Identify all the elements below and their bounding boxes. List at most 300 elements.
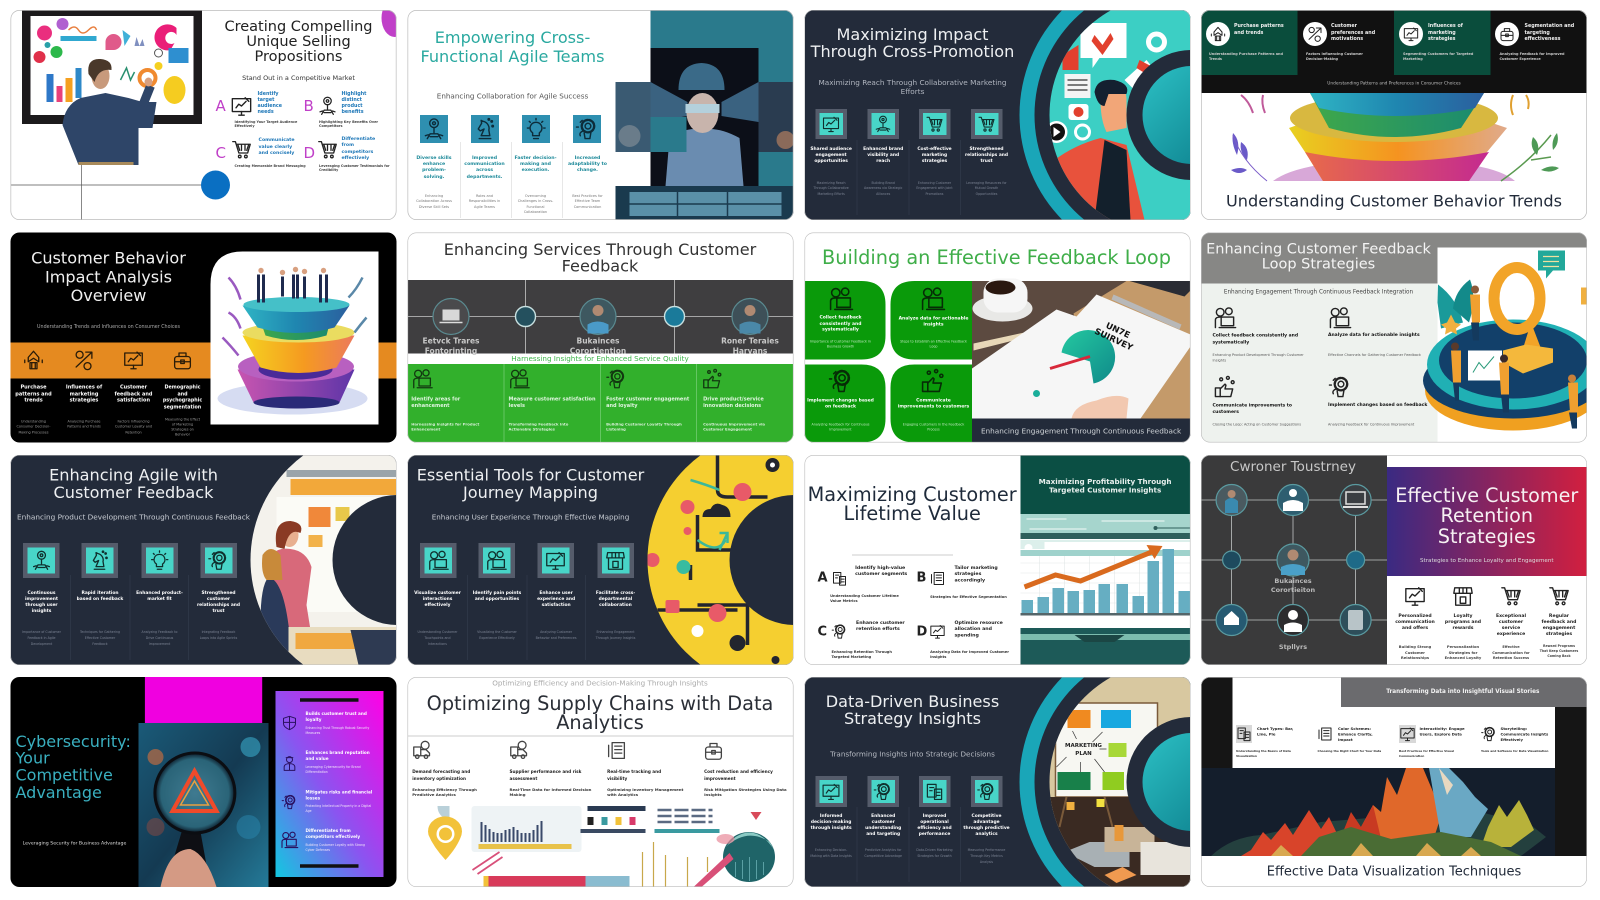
column: identify areas: Harnessing Insights for Product: [411, 421, 480, 426]
item: trust: Measures: [306, 731, 321, 735]
column: loyalty: Enhanced Loyalty: [1445, 656, 1482, 660]
item: improved communication: [464, 115, 505, 209]
title: Data-Driven Business: [826, 692, 999, 710]
item: color schemes: Choosing the Right Chart for Your Data: [1318, 749, 1381, 753]
tile: analyze data: Analyze data for actionable: [899, 315, 968, 321]
slide: Maximizing Impact Through Cross-Promotion: [804, 10, 1190, 220]
column: preferences: Decision-Making: [1306, 57, 1339, 61]
item: chart types: Visualization: [1236, 754, 1257, 758]
item: increased adaptability: Best Practices for: [572, 194, 603, 198]
photo: process diagram: Roner Teraies: [721, 336, 779, 345]
item: analyze: [1328, 308, 1422, 357]
title: Advantage: [16, 782, 102, 802]
item: improved communication: Roles and: [476, 194, 493, 198]
item A: customer segments: [855, 570, 907, 576]
photo: process diagram: Eetvck Trares: [422, 336, 480, 345]
item: cost-effective: Engagement with Joint: [916, 186, 953, 190]
item: risks: Age: [306, 809, 312, 813]
item: customer understanding: and targeting: [866, 830, 900, 836]
item: rapid iteration: Rapid iteration: [81, 590, 119, 596]
item: shared audience: engagement: [816, 152, 847, 158]
caption bar: [972, 418, 1191, 442]
slide: Maximizing Customer Lifetime Value: [804, 455, 1190, 665]
column: drive innovation: Customer Engagement: [703, 426, 752, 431]
column: drive innovation: Continuous Improvement via: [703, 421, 765, 426]
column: foster engagement: Building Customer Loyalty Through: [606, 421, 682, 426]
slide background: [408, 10, 794, 220]
item: collaboration: Facilitate cross-: [596, 590, 635, 596]
item: diverse skills: Diverse Skill Sets: [419, 205, 449, 209]
column dividers: [504, 364, 696, 442]
gradient title panel: [1387, 467, 1587, 576]
item A: Value Metrics: [830, 599, 858, 603]
column: loyalty: Personalization: [1447, 645, 1479, 649]
column: regular feedback: That Keep Customers: [1540, 649, 1578, 653]
column: segmentation: Measuring the Effect: [165, 418, 201, 422]
column: segmentation: Segmentation and: [1524, 22, 1575, 28]
slide: Effective Customer Retention Strategies: [1201, 455, 1587, 665]
item: trust: [284, 710, 370, 735]
item C: C: [216, 144, 226, 162]
item: collaboration: departmental: [599, 596, 633, 602]
photo labels: Bukainces: [1274, 577, 1312, 585]
column: foster engagement: [606, 371, 690, 431]
gray header: [1201, 232, 1587, 284]
item: increased adaptability: [568, 115, 608, 209]
item B: distinct: [342, 96, 363, 102]
tile: implement changes: [804, 364, 886, 442]
item: faster decisions: execution.: [522, 166, 550, 172]
tile: collect feedback: Importance of Customer Feedback in: [810, 340, 871, 344]
inner dark circle: [1126, 50, 1190, 180]
subtitle: Harnessing Insights for Enhanced Service Quality: [511, 354, 689, 363]
item: informed decisions: decision-making: [811, 818, 851, 824]
item: brand visibility: reach: [876, 158, 890, 164]
item: competitive advantage: Through Key Metrics: [969, 854, 1003, 858]
column: loyalty: Strategies for: [1449, 651, 1478, 655]
slide background: [408, 455, 794, 665]
photo: process diagram: Harvans: [733, 346, 768, 355]
column: supplier: Supplier performance and risk: [510, 768, 582, 774]
slide background: [804, 10, 1190, 220]
item: operational efficiency: Improved: [923, 812, 946, 818]
item C: Targeted Marketing: [832, 655, 872, 659]
column: purchase patterns: Purchase: [21, 384, 47, 390]
item: enhanced fit: Improvement: [149, 642, 171, 646]
item: improved communication: communication: [464, 160, 505, 166]
item: strengthened relationships: trust: [212, 608, 225, 614]
title: Journey Mapping: [462, 482, 598, 502]
column: tracking: visibility: [607, 776, 627, 780]
item: collaboration: collaboration: [599, 602, 632, 608]
column: purchase patterns: Trends: [1209, 57, 1222, 61]
item: trust: Enhancing Trust Through Robust Security: [306, 726, 370, 730]
title: Optimizing Supply Chains with Data: [427, 692, 773, 714]
item: relationships: Leveraging Resources for: [966, 181, 1007, 185]
slide background: [1201, 232, 1587, 442]
photo: magnifier on warning sign: [138, 723, 268, 887]
item: competitive advantage: analytics: [975, 830, 998, 836]
item: continuous improvement: improvement: [25, 596, 58, 602]
title: Enhancing Agile with: [49, 465, 218, 484]
slide background: [804, 455, 1190, 665]
photo: marketing plan board: [1044, 677, 1194, 887]
item: diverse skills: Collaboration Across: [416, 199, 452, 203]
item: strengthened relationships: [197, 543, 240, 640]
item: rapid iteration: based on feedback: [77, 596, 123, 602]
item: diverse skills: enhance: [423, 160, 445, 166]
slide background: [10, 232, 396, 442]
item: competitive advantage: Analysis: [980, 860, 993, 864]
title: Understanding Customer Behavior Trends: [1226, 192, 1562, 210]
teal ring: [1020, 632, 1320, 900]
column: preferences: Factors Influencing Customer: [1306, 52, 1363, 56]
column: influences: Influences of: [66, 384, 103, 390]
column: foster engagement: Foster customer engagement: [606, 396, 690, 402]
frame lines: [10, 165, 202, 220]
item: chart types: Line, Pie: [1257, 731, 1276, 736]
item: storytelling: [1481, 726, 1549, 753]
item A: [818, 564, 907, 603]
photo caption text: Cwroner Toustrney: [1230, 459, 1356, 475]
item: color schemes: Color Schemes:: [1338, 726, 1372, 730]
item A: A: [216, 97, 226, 115]
item A: target: [258, 96, 275, 102]
header text: Maximizing Profitability Through: [1039, 476, 1172, 486]
column: drive innovation: innovation decisions: [703, 403, 761, 409]
column: segmentation: Behavior: [175, 432, 191, 436]
tile: collect feedback: consistently and: [820, 320, 861, 326]
gray header: [1341, 677, 1587, 707]
slide background: [804, 232, 1190, 442]
column: segmentation: psychographic: [163, 397, 202, 403]
photo: journey network: [1201, 455, 1387, 665]
column: personalized: Relationships: [1401, 656, 1430, 660]
column: purchase patterns: patterns and: [15, 392, 52, 398]
dark side strips: [1201, 677, 1587, 856]
item: visualize: Touchpoints and: [424, 636, 450, 640]
item: cost-effective: marketing: [922, 152, 947, 158]
photo: process diagram: Bukainces: [576, 336, 620, 345]
column: marketing influences: marketing: [1428, 30, 1456, 36]
subtitle: Maximizing Reach Through Collaborative Marketing: [819, 78, 1006, 86]
item: analyze: Analyze data for actionable insights: [1328, 332, 1420, 338]
chart image: [1020, 514, 1190, 665]
item A: needs: [258, 108, 274, 114]
item: visualize: Interactions: [428, 642, 447, 646]
item: customer understanding: understanding: [865, 824, 901, 830]
item C: [818, 620, 905, 659]
item: collaboration: Enhancing Engagement: [596, 630, 635, 634]
slide border: [1201, 677, 1587, 887]
slide: Essential Tools for Customer Journey Mapping: [408, 455, 860, 665]
item D: Differentiate: [342, 136, 375, 142]
column: tracking: [607, 743, 684, 796]
column: segmentation: [1495, 22, 1575, 61]
item: operational efficiency: Data-Driven Marketing: [916, 848, 953, 852]
column: personalized: communication: [1395, 618, 1435, 624]
item B: accordingly: [954, 577, 985, 583]
column dividers: [70, 575, 188, 660]
item B: product: [342, 102, 363, 108]
item: faster decisions: Faster decision-: [514, 154, 557, 160]
column: marketing influences: strategies: [1428, 36, 1456, 42]
slide: Creating Compelling Unique Selling Propositions: [10, 0, 408, 220]
tile: analyze data: Steps to Establish an Effective Feedback: [900, 340, 967, 344]
item: cost-effective: [916, 109, 953, 196]
photo labels: Stpllyrs: [1279, 643, 1307, 651]
subtitle: Understanding Trends and Influences on Consumer Choices: [37, 324, 180, 330]
item A: Understanding Customer Lifetime: [830, 594, 899, 598]
illustration: feedback loop platform: [1423, 248, 1600, 442]
column: purchase patterns: [15, 351, 52, 434]
item: relationships: trust: [980, 158, 993, 164]
item C: Enhancing Retention Through: [832, 650, 892, 654]
teal ring: [1020, 10, 1190, 220]
column: foster engagement: Listening: [606, 426, 626, 431]
item: enhance UX: experience and: [537, 596, 575, 602]
item: brand visibility: Enhanced brand: [863, 146, 903, 152]
photo: survey on clipboard: SUIRVEY: [1093, 327, 1135, 354]
item: operational efficiency: operational: [920, 818, 949, 824]
dark ring: [1034, 10, 1190, 220]
title: Through Cross-Promotion: [810, 42, 1014, 60]
tile: implement changes: Analyzing Feedback for Continuous: [811, 422, 870, 426]
item: relationships: relationships and: [965, 152, 1008, 158]
title: Enhancing Customer Feedback: [1206, 242, 1431, 258]
item: customer understanding: Enhanced: [871, 812, 895, 818]
item D: Credibility: [319, 168, 339, 172]
item: increased adaptability: Communication: [574, 205, 601, 209]
item C: value clearly: [258, 144, 292, 150]
item: storytelling: Storytelling:: [1500, 726, 1528, 730]
tile: collect feedback: [804, 281, 886, 360]
column: segmentation: Demographic: [165, 384, 201, 390]
tile: communicate improvements: [890, 364, 972, 442]
tile: implement changes: on feedback: [825, 403, 857, 409]
item: differentiates: Differentiates from: [306, 828, 351, 832]
column: purchase patterns: Understanding: [21, 420, 46, 424]
subtitle: Enhancing Product Development Through Continuous Feedback: [17, 512, 251, 522]
photo: process diagram: Corortiention: [570, 346, 626, 355]
title: Impact Analysis: [45, 267, 172, 286]
item A: Identify: [258, 90, 279, 96]
item: analyze: Effective Channels for Gathering Customer Feedback: [1328, 353, 1422, 357]
header band: [1201, 10, 1587, 93]
slide border: [408, 677, 794, 887]
item: communicate: [1212, 376, 1301, 426]
item: trust: loyalty: [306, 716, 322, 722]
item: cost-effective: Promotions: [926, 192, 944, 196]
column: service: [1492, 588, 1530, 660]
column: identify areas: Enhancement: [411, 426, 441, 431]
column: purchase patterns: Consumer Decision-: [16, 424, 51, 428]
item: operational efficiency: Strategies for Growth: [917, 854, 952, 858]
item: chart types: Understanding the Basics of Data: [1236, 749, 1291, 753]
item: competitive advantage: [963, 776, 1010, 864]
column: marketing influences: Segmenting Customers for Targeted: [1403, 52, 1474, 56]
title: Empowering Cross-: [435, 28, 590, 46]
column: cost: Insights: [704, 792, 722, 796]
column: cost: Cost reduction and efficiency: [704, 768, 773, 774]
column: influences: marketing: [70, 392, 99, 398]
item: collect: Enhancing Product Development Through Customer: [1212, 353, 1304, 357]
column: personalized: [1395, 588, 1435, 660]
item: brand visibility: [863, 109, 903, 196]
item D: D: [916, 624, 928, 640]
item: relationships: Opportunities: [976, 192, 998, 196]
teal blocks: [650, 10, 794, 82]
column: purchase patterns: Making Processes: [18, 430, 49, 434]
item: competitive advantage: Competitive: [972, 812, 1002, 818]
rule: [852, 554, 953, 556]
photo: presenter at whiteboard: [22, 10, 202, 165]
column: influences: [66, 351, 103, 428]
title: Effective Data Visualization Techniques: [1267, 864, 1521, 880]
column: influences: Analyzing Purchase: [68, 420, 100, 424]
item: implement: Analyzing Feedback for Continuous Improvement: [1328, 422, 1415, 426]
item C: retention efforts: [856, 626, 900, 632]
column: preferences: preferences and: [1331, 30, 1376, 36]
item C: Enhance customer: [856, 620, 905, 626]
column: preferences: motivations: [1331, 36, 1363, 42]
item: faster decisions: making and: [520, 160, 551, 166]
column: loyalty: [1445, 588, 1482, 660]
corner accent: [382, 10, 396, 37]
item: improved communication: Improved: [472, 154, 497, 160]
item: color schemes: Impact: [1338, 736, 1353, 742]
item: collaboration: [595, 543, 636, 640]
item: enhance UX: Enhance user: [539, 590, 574, 596]
item: reputation: [284, 750, 370, 774]
column: measure satisfaction: levels: [508, 403, 525, 409]
column: tracking: with Analytics: [607, 792, 639, 796]
item: communicate: Closing the Loop: Acting on Customer Suggestions: [1212, 422, 1301, 426]
column: segmentation: and: [177, 391, 188, 397]
column: supplier: assessment: [510, 776, 537, 780]
item B: strategies: [954, 570, 982, 576]
item D: Optimize resource: [954, 620, 1003, 626]
title: Lifetime Value: [844, 502, 981, 524]
title: Overview: [71, 286, 146, 304]
item: faster decisions: Challenges in Cross-: [518, 199, 554, 203]
item D: Leveraging Customer Testimonials for: [319, 164, 390, 168]
slide background: [1201, 677, 1587, 887]
column: regular feedback: Reward Programs: [1543, 644, 1575, 648]
item: enhance UX: satisfaction: [542, 602, 571, 608]
item: storytelling: Communicate Insights: [1500, 731, 1549, 736]
item: diverse skills: Diverse skills: [416, 154, 452, 160]
illustration: funnel: [1231, 93, 1559, 181]
title: Feedback: [562, 256, 639, 275]
title: Unique Selling: [246, 34, 351, 50]
item: increased adaptability: Effective Team: [575, 199, 601, 203]
item: shared audience: [810, 109, 852, 196]
item: strengthened relationships: relationships and: [197, 602, 240, 608]
column: measure satisfaction: Transforming Feedback into: [508, 421, 569, 426]
item: shared audience: Maximizing Reach: [817, 181, 846, 185]
item: increased adaptability: change.: [577, 166, 598, 172]
item: continuous improvement: [22, 543, 62, 646]
column: regular feedback: engagement: [1543, 624, 1576, 630]
item: strengthened relationships: Loops into Agile Sprints: [200, 636, 238, 640]
eyebrow text: Optimizing Efficiency and Decision-Making Through Insights: [492, 678, 708, 688]
item B: [304, 90, 378, 128]
column: satisfaction: Customer Loyalty and: [115, 424, 152, 428]
item: collaboration: Through Journey Insights: [595, 636, 636, 640]
column: satisfaction: feedback and: [114, 392, 153, 398]
item: implement: [1328, 378, 1428, 426]
item: customer understanding: [864, 776, 902, 858]
item B: Strategies for Effective Segmentation: [930, 595, 1007, 599]
photo: marketing plan board: MARKETING: [1065, 743, 1102, 749]
item D: [304, 136, 390, 172]
column: demand: [412, 741, 477, 796]
item D: effectively: [342, 154, 369, 160]
item: informed decisions: [810, 776, 852, 858]
column: preferences: Customer: [1331, 22, 1358, 28]
column: influences: strategies: [70, 398, 98, 404]
column: tracking: Optimizing Inventory Management: [607, 786, 684, 792]
item: pain points: Experience Effectively: [479, 636, 515, 640]
title: Your: [14, 748, 50, 767]
item: collect: [1212, 308, 1304, 362]
slide: Customer Behavior Impact Analysis Overview: [10, 232, 396, 442]
slide background: [10, 10, 396, 220]
column: segmentation: Analyzing Feedback for Improved: [1500, 52, 1565, 56]
inner dark circle: [1126, 717, 1256, 847]
column: tracking: Real-time tracking and: [607, 768, 661, 774]
item B: [916, 564, 1007, 599]
item: shared audience: Shared audience: [810, 146, 852, 152]
column: measure satisfaction: [508, 370, 596, 431]
column: demand: Enhancing Efficiency Through: [412, 786, 477, 792]
column: drive innovation: [703, 369, 765, 431]
item: communicate: Communicate improvements to: [1212, 402, 1292, 408]
column: preferences: [1303, 22, 1376, 61]
column: satisfaction: [114, 352, 153, 434]
photo: process diagram: Fontorinting: [425, 346, 477, 355]
slide background: [10, 677, 396, 887]
item: interactivity: Best Practices for Effective Visual: [1399, 749, 1454, 753]
item: shared audience: opportunities: [814, 158, 848, 164]
column: measure satisfaction: Actionable Strategies: [508, 426, 556, 431]
column: cost: improvement: [704, 776, 736, 780]
column: service: service: [1502, 624, 1520, 630]
illustration panel: tiered funnel: [210, 252, 378, 424]
illustration: analytics collage: [428, 806, 776, 887]
item: trust: Builds customer trust and: [306, 710, 367, 716]
tile: analyze data: insights: [923, 321, 944, 327]
slide: Enhancing Services Through Customer Feedback: [408, 232, 794, 442]
column: marketing influences: Influences of: [1428, 22, 1464, 28]
item: interactivity: Users, Explore Data: [1420, 731, 1462, 736]
subtitle: Enhancing User Experience Through Effective Mapping: [432, 512, 629, 522]
item: faster decisions: [514, 115, 557, 214]
item: cost-effective: Cost-effective: [917, 146, 952, 152]
column: identify areas: Identify areas for: [411, 396, 461, 402]
panel bars: [300, 700, 358, 866]
caption: Enhancing Engagement Through Continuous Feedback: [981, 426, 1182, 436]
column: satisfaction: Customer: [120, 384, 148, 390]
item: chart types: [1236, 725, 1294, 758]
magenta block: [145, 677, 262, 723]
item B: Competitors: [319, 124, 343, 128]
slide background: [1201, 10, 1587, 220]
column: influences: Patterns and Trends: [67, 424, 101, 428]
tile: collect feedback: Collect feedback: [819, 314, 863, 320]
slide: Optimizing Supply Chains with Data Analytics: [408, 677, 794, 887]
